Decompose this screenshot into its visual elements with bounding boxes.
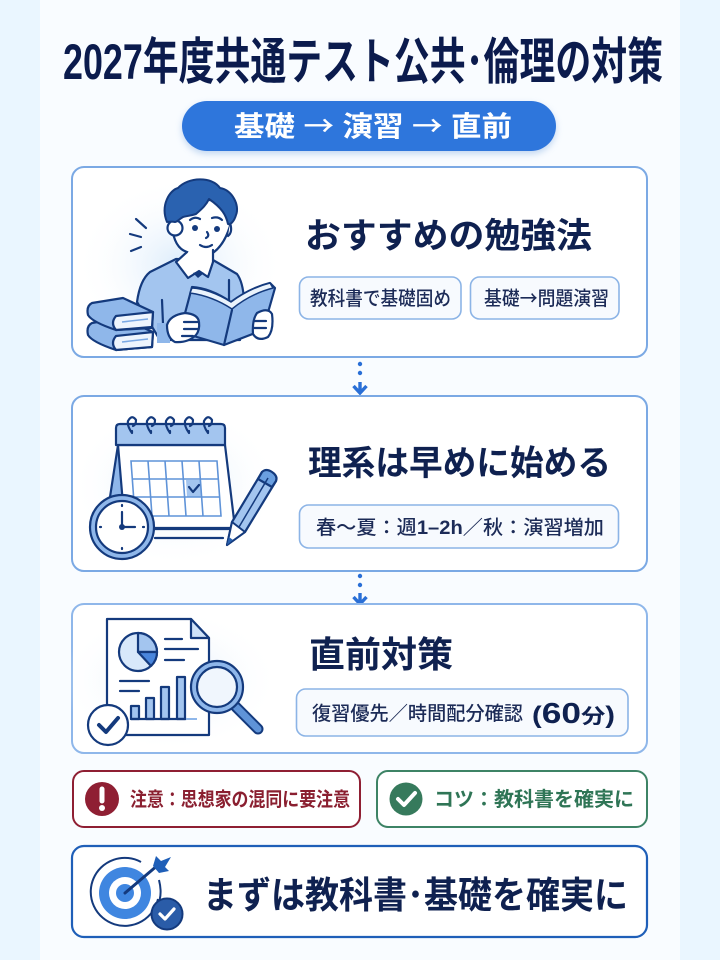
arrow: dotted down 1 (354, 362, 366, 393)
icon: stacked books (88, 298, 153, 350)
icon: open book (180, 283, 275, 345)
subtitle pill: 基礎 → 演習 → 直前 (182, 101, 556, 151)
callout: 注意: 注意：思想家の混同に要注意 (130, 789, 350, 811)
chip: 春～夏：週1–2h／秋：演習増加 (300, 505, 618, 548)
icon: exclamation (85, 782, 119, 816)
chip: 教科書で基礎固め (300, 277, 461, 319)
icon: student reading a book (88, 179, 275, 350)
arrow: dotted down 2 (354, 574, 366, 604)
heading: おすすめの勉強法 (305, 217, 592, 256)
panel: conclusion: まずは教科書･基礎を確実に (203, 875, 628, 916)
icon: check circle (88, 705, 128, 745)
icon: magnifying glass (191, 661, 258, 729)
icon: calendar with clock and pencil (90, 417, 276, 559)
chip: 復習優先／時間配分確認（60分）: 復習優先／時間配分確認 (312, 703, 523, 725)
panel: 理系は早めに始める (70, 396, 647, 571)
chip: 基礎→問題演習 (470, 277, 619, 319)
chip: 教科書で基礎固め: 教科書で基礎固め (310, 288, 451, 310)
icon: document with charts (107, 619, 209, 735)
heading: 理系は早めに始める (308, 445, 611, 483)
icon: green check (390, 782, 422, 816)
callout: コツ (377, 771, 647, 827)
panel: conclusion (72, 846, 647, 937)
chip: 春～夏：週1–2h／秋：演習増加: 春～夏：週1–2h／秋：演習増加 (316, 517, 604, 539)
panel: 直前対策 (60, 604, 647, 753)
chip: 復習優先／時間配分確認（60分）: (60 分) (532, 698, 615, 730)
panel: おすすめの勉強法 (72, 167, 647, 357)
chip: 復習優先／時間配分確認（60分） (296, 689, 628, 736)
icon: clock (90, 495, 154, 559)
subtitle pill: 基礎 → 演習 → 直前: 基礎 → 演習 → 直前 (234, 105, 512, 145)
heading: 直前対策 (309, 634, 453, 675)
callout: 注意 (73, 771, 360, 827)
icon: target with arrow (91, 856, 182, 930)
icon: pencil (227, 470, 276, 545)
chip: 基礎→問題演習: 基礎→問題演習 (484, 282, 609, 311)
callout: コツ: コツ：教科書を確実に (434, 788, 634, 811)
